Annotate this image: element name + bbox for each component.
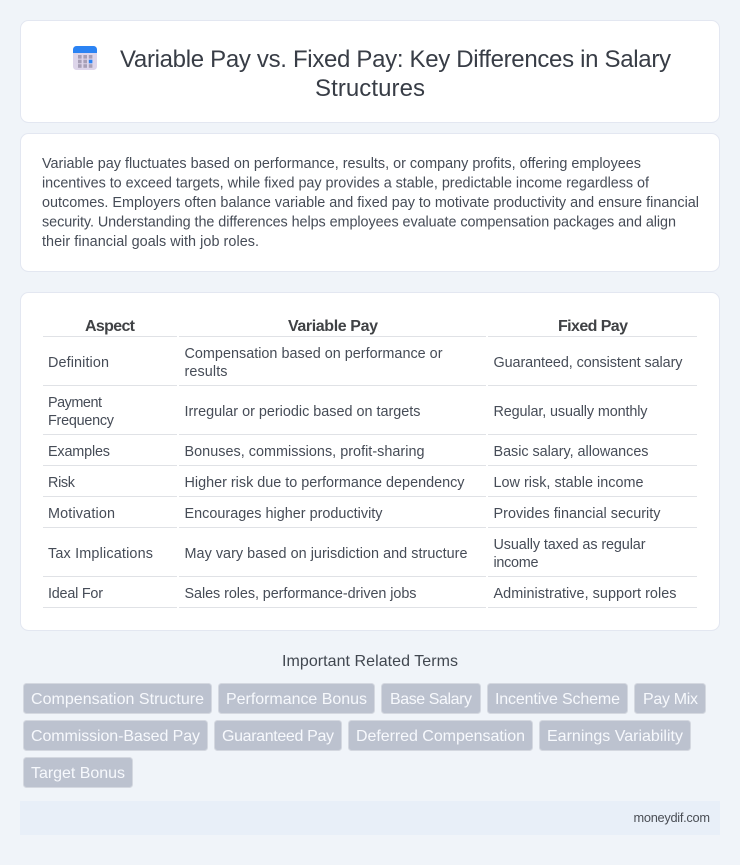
panel: introduction text: incentives to exceed targets, while fixed pay provides a stable, predictable income regardless of	[42, 176, 650, 192]
table header row	[85, 318, 628, 335]
row: ideal for: Administrative, support roles	[494, 586, 676, 602]
row: motivation: Encourages higher productivity	[184, 506, 383, 522]
table header row: Variable Pay	[288, 318, 378, 335]
row: risk: Risk	[48, 475, 76, 491]
row: definition: results	[184, 364, 228, 380]
row: tax implications: May vary based on jurisdiction and structure	[184, 546, 468, 562]
tag list: related terms: Pay Mix	[643, 691, 698, 708]
panel: introduction text: their financial goals with job roles.	[42, 234, 259, 250]
panel: introduction text: security. Understanding the differences helps employees evaluate compensation packages and align	[42, 214, 676, 230]
row: ideal for: Ideal For	[48, 586, 103, 602]
panel: introduction text: outcomes. Employers often balance variable and fixed pay to motivate productivity and ensure financial	[42, 195, 699, 211]
row: tax implications: Usually taxed as regular	[494, 537, 646, 553]
title	[120, 46, 671, 102]
row: definition: Definition	[48, 355, 109, 371]
row: risk	[48, 475, 644, 491]
table header row: Aspect	[85, 318, 136, 335]
row: payment frequency	[48, 395, 648, 429]
row: definition: Compensation based on performance or	[184, 346, 443, 362]
row: risk: Low risk, stable income	[494, 475, 644, 491]
table header row: Fixed Pay	[558, 318, 628, 335]
row: examples	[48, 444, 648, 460]
tag list: related terms: Compensation Structure	[31, 691, 204, 708]
row: definition: Guaranteed, consistent salary	[494, 355, 683, 371]
tag list: related terms: Base Salary	[390, 691, 472, 708]
row: ideal for: Sales roles, performance-driven jobs	[184, 586, 416, 602]
row: payment frequency: Frequency	[48, 413, 115, 429]
tag list: related terms: Commission-Based Pay	[31, 728, 200, 745]
tag list: related terms: Earnings Variability	[547, 728, 683, 745]
row: definition	[48, 346, 683, 380]
footer bar: moneydif.com	[634, 810, 710, 825]
tag list: related terms: Target Bonus	[31, 765, 125, 782]
row: ideal for	[48, 586, 676, 602]
panel: title header	[20, 20, 720, 122]
panel: introduction text: Variable pay fluctuates based on performance, results, or company profits, offering employees	[42, 156, 641, 172]
tag list: related terms: Performance Bonus	[226, 691, 367, 708]
footer bar	[20, 801, 720, 835]
row: tax implications: Tax Implications	[48, 546, 153, 562]
title: Structures	[315, 75, 425, 102]
icon: calendar	[73, 46, 97, 70]
tag list: related terms	[24, 684, 706, 788]
row: motivation: Motivation	[48, 506, 115, 522]
tag list: related terms: Deferred Compensation	[356, 728, 525, 745]
heading: important related terms: Important Related Terms	[282, 653, 458, 670]
row: tax implications: income	[494, 555, 538, 571]
row: payment frequency: Payment	[48, 395, 102, 411]
tag list: related terms: Guaranteed Pay	[222, 728, 334, 745]
row: payment frequency: Irregular or periodic based on targets	[184, 404, 420, 420]
row: motivation	[48, 506, 661, 522]
title: Variable Pay vs. Fixed Pay: Key Differences in Salary	[120, 46, 671, 73]
panel: introduction text	[20, 134, 720, 272]
row: payment frequency: Regular, usually monthly	[494, 404, 648, 420]
row: examples: Examples	[48, 444, 110, 460]
panel: comparison table	[20, 292, 720, 630]
row: risk: Higher risk due to performance dependency	[184, 475, 465, 491]
row: examples: Basic salary, allowances	[494, 444, 648, 460]
tag list: related terms: Incentive Scheme	[495, 691, 620, 708]
row: examples: Bonuses, commissions, profit-sharing	[184, 444, 424, 460]
row: tax implications	[48, 537, 646, 571]
row: motivation: Provides financial security	[494, 506, 661, 522]
